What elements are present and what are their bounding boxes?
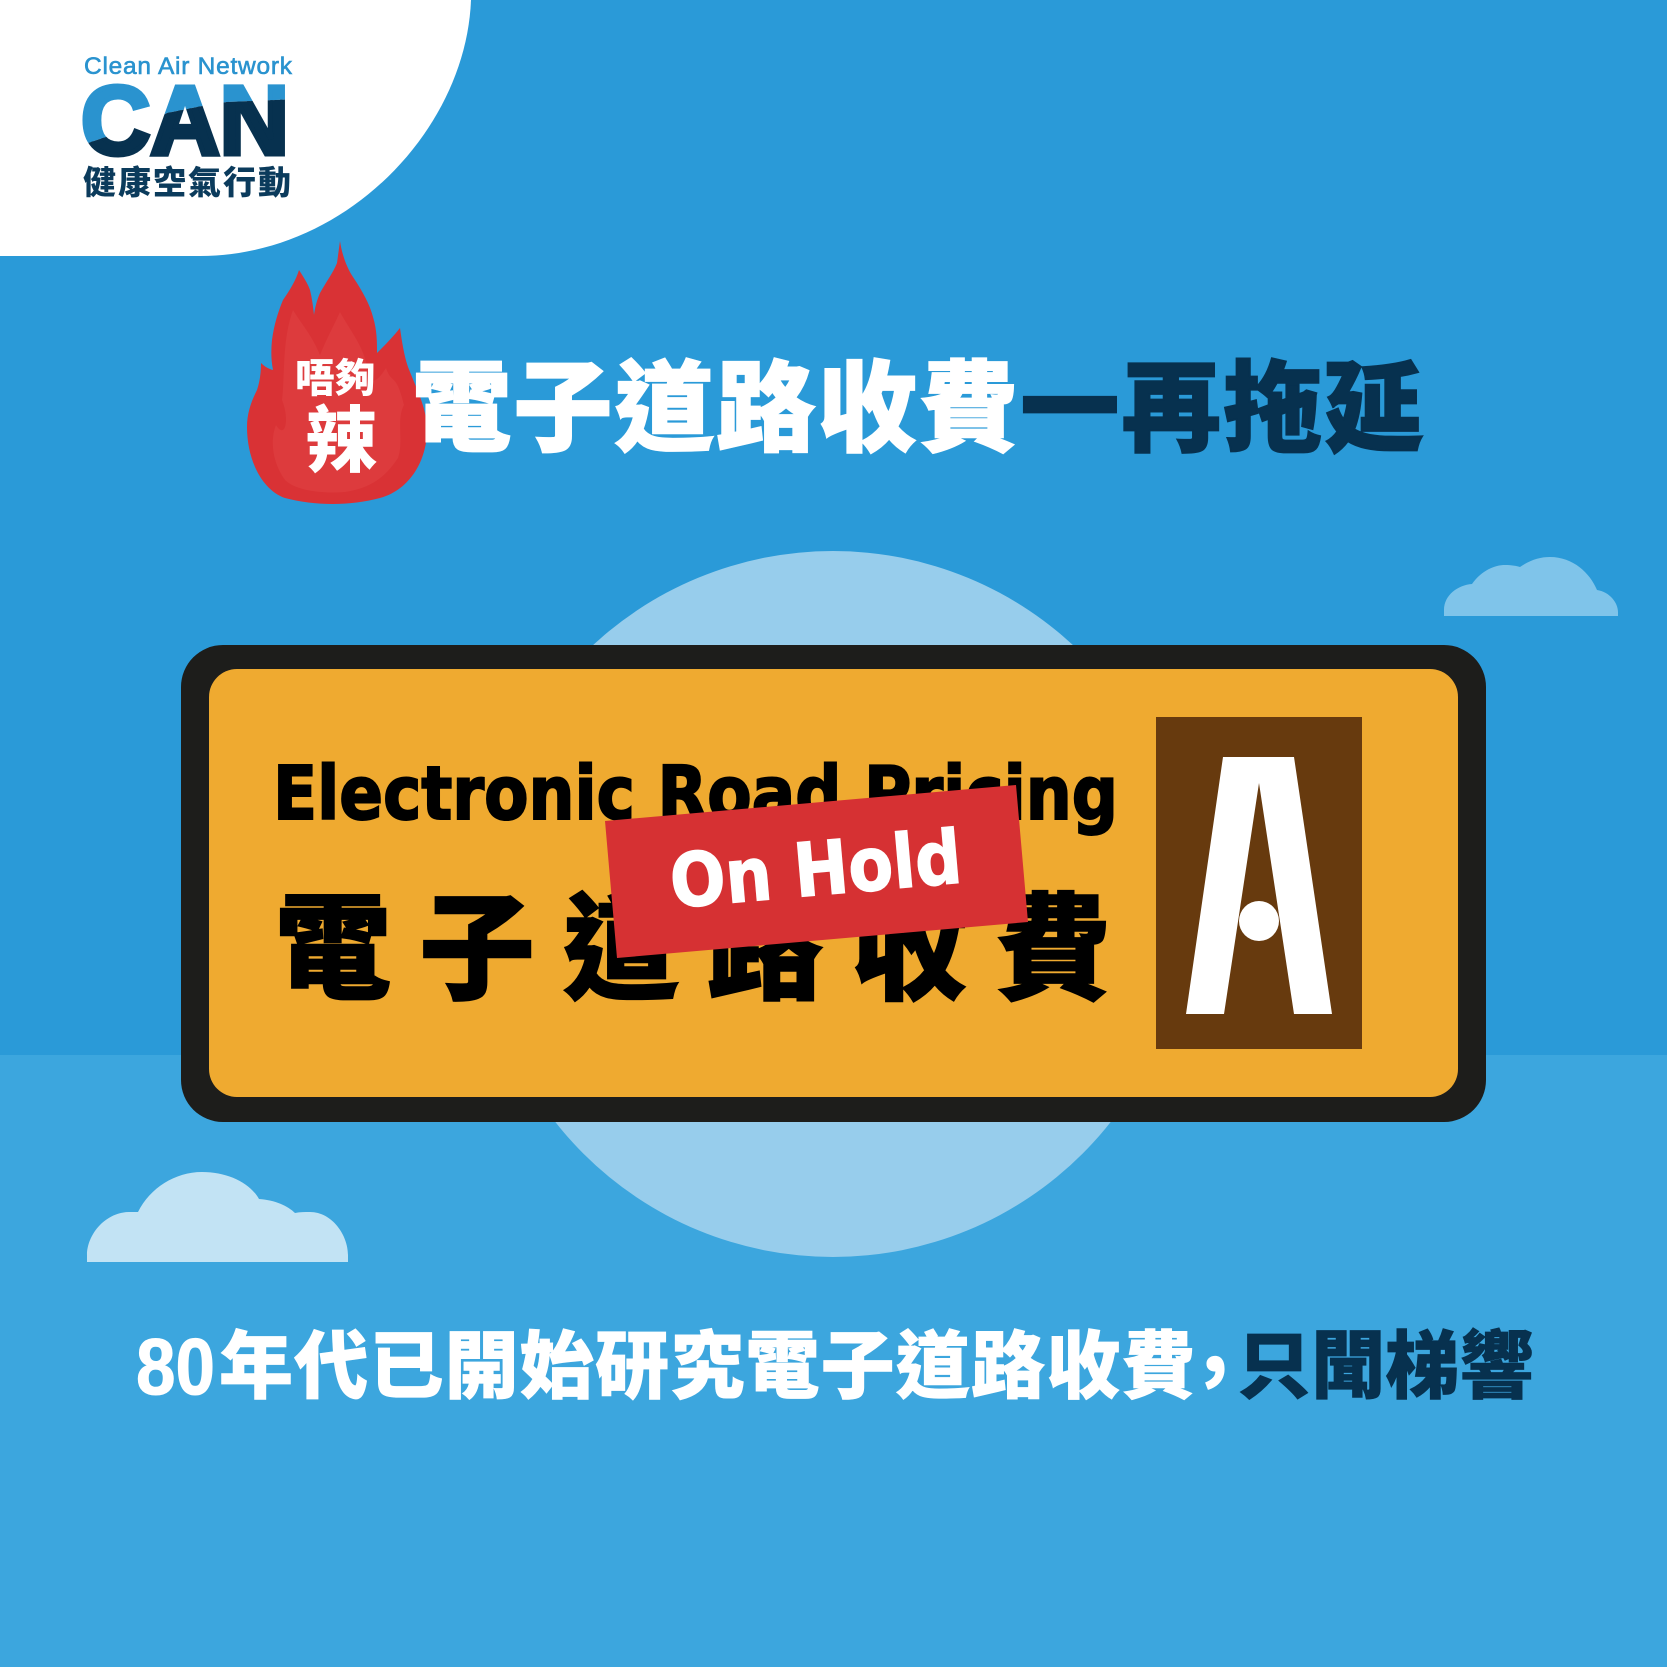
flame text 辣: 辣 <box>305 382 377 487</box>
sticker rectangle <box>605 785 1028 958</box>
subtitle comma: , <box>1201 1283 1228 1395</box>
subtitle number: 80 <box>136 1322 215 1411</box>
title: 電子道路收費一再拖延 <box>412 328 1426 472</box>
background ground band <box>0 1055 1667 1667</box>
on hold sticker <box>605 785 1028 958</box>
flame outer <box>247 241 427 504</box>
subtitle dark text: 只聞梯響 <box>1237 1307 1534 1414</box>
letter A strokes <box>1186 757 1332 1014</box>
logo CAN wordmark light part: CAN <box>81 66 289 175</box>
logo english name: Clean Air Network <box>84 53 293 80</box>
sticker text: On Hold <box>667 814 965 926</box>
cloud: lower left <box>87 1172 348 1262</box>
route letter A <box>1186 757 1332 1014</box>
flame inner <box>273 310 404 492</box>
icon: flame badge <box>247 241 427 504</box>
cloud: upper right <box>1444 557 1618 616</box>
sign border <box>181 645 1486 1122</box>
background sky <box>0 0 1667 1055</box>
logo: Clean Air Network CAN <box>81 53 293 204</box>
flame text 唔夠: 唔夠 <box>295 346 375 404</box>
letter A dot <box>1239 901 1279 941</box>
background circle <box>480 551 1186 1257</box>
sign chinese text: 電子道路收費 <box>275 856 1139 1024</box>
route panel <box>1156 717 1362 1049</box>
logo CAN wordmark dark part: CAN <box>81 66 289 175</box>
sign english text: Electronic Road Pricing <box>273 751 1118 837</box>
road sign <box>181 645 1486 1122</box>
subtitle white text: 年代已開始研究電子道路收費 <box>219 1307 1197 1414</box>
logo chinese name: 健康空氣行動 <box>83 156 291 204</box>
sign face <box>209 669 1458 1097</box>
subtitle <box>136 1283 1534 1414</box>
white logo corner panel <box>0 0 471 256</box>
